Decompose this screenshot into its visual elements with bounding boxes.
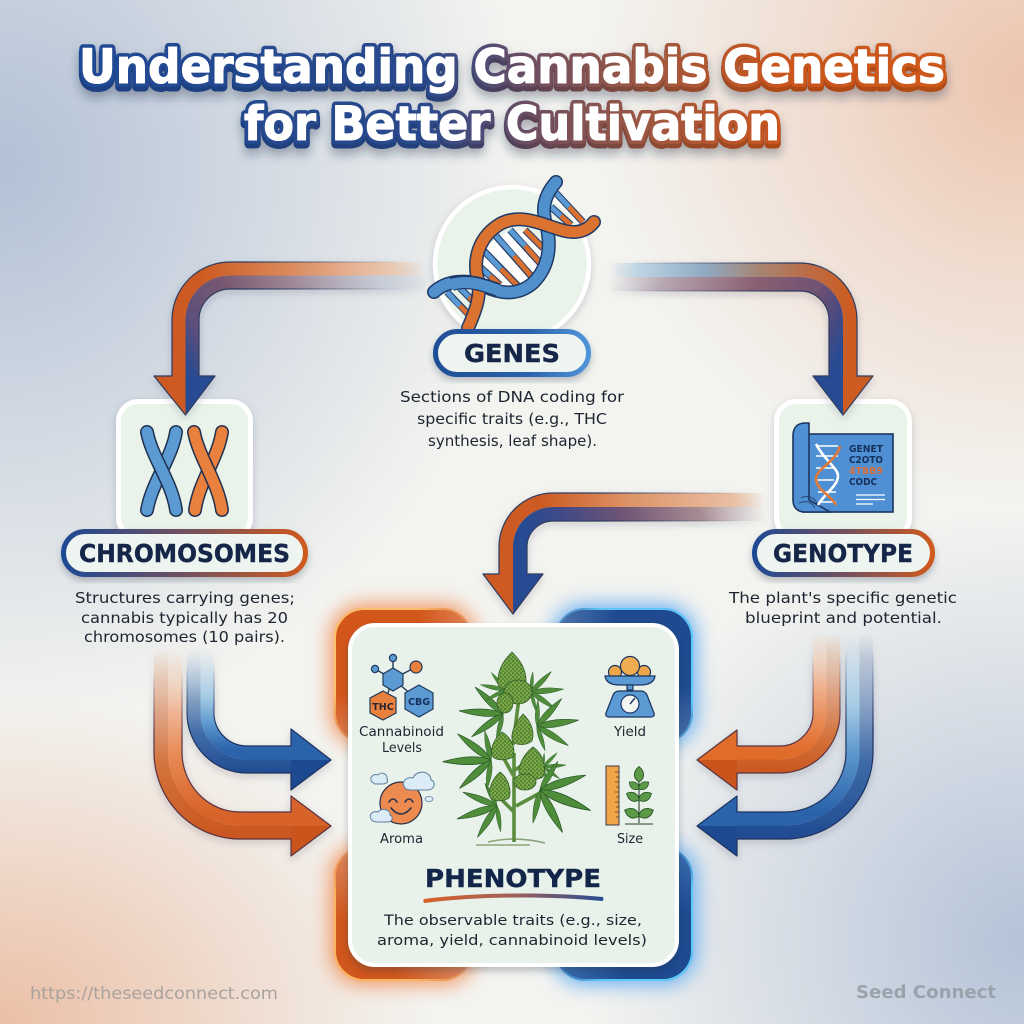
arrow: genotype to phenotype, blue right [697,635,873,856]
text: phenotype description: aroma, yield, cannabinoid levels) [377,933,647,949]
text: genotype description [728,589,957,627]
arrow: genes to chromosomes [154,262,425,415]
text: genotype description: blueprint and potential. [745,609,942,627]
icon: genetic blueprint [793,423,893,512]
text: genes description [400,388,625,450]
node: genes [400,182,625,450]
icon: genetic blueprint: C2OTO [849,455,883,466]
label: cannabinoid levels: Levels [382,740,422,756]
label: aroma: Aroma [380,831,423,847]
arrow: genotype to phenotype [483,493,765,614]
title: Understanding Cannabis Genetics [79,44,945,99]
corner brackets [334,608,693,981]
label: yield: Yield [613,724,646,740]
label: cannabinoid levels [359,724,444,756]
genes circle [435,187,589,341]
icon: yield scale [605,656,655,717]
underline [423,893,603,903]
label: genes: GENES [464,339,560,368]
title: for Better Cultivation [244,97,780,152]
text: chromosomes description: chromosomes (10 pairs). [84,628,285,646]
text: genotype description: The plant's specific genetic [728,589,957,607]
label: genotype [754,532,932,574]
footer url: https://theseedconnect.com [30,984,278,1004]
title [79,40,945,156]
genotype card [776,402,910,538]
arrow: genotype to phenotype, orange right [697,635,840,790]
icon: DNA helix [434,182,594,328]
arrow: chromosomes to phenotype, blue [187,650,331,790]
footer brand: Seed Connect [856,982,996,1003]
icon: genetic blueprint: GENET [849,444,883,455]
text: genes description: synthesis, leaf shape). [428,432,597,450]
panel: phenotype [331,605,696,984]
arrow: chromosomes to phenotype, orange [154,650,331,856]
text: genes description: Sections of DNA coding for [400,388,625,406]
icon: ruler and sprout [606,766,655,825]
icon: cannabis plant [442,652,603,845]
icon: genetic blueprint: CODC [849,477,877,488]
title: for Better Cultivation [244,101,780,156]
text: chromosomes description: Structures carrying genes; [75,589,295,607]
title: for Better Cultivation [244,97,780,152]
label: chromosomes [64,532,306,574]
label: cannabinoid levels: Cannabinoid [359,724,444,740]
text: phenotype description: The observable traits (e.g., size, [383,913,642,929]
icon: cannabinoid molecule [370,654,433,720]
icon: cannabinoid molecule: CBG [408,697,430,708]
text: genes description: specific traits (e.g., THC [417,410,607,428]
label: genotype: GENOTYPE [773,539,913,568]
label: genes [436,332,588,374]
node: chromosomes [64,402,306,646]
label: chromosomes: CHROMOSOMES [79,539,290,568]
title: Understanding Cannabis Genetics [79,40,945,95]
heading: phenotype: PHENOTYPE [425,864,601,893]
text: phenotype description [377,913,647,949]
icon: genetic blueprint: 4TBB9 [849,466,883,477]
icon: chromosome pair [147,432,222,510]
arrow: genes to genotype [610,263,873,415]
label: size: Size [617,831,643,847]
text: chromosomes description [75,589,295,646]
phenotype card [350,625,677,965]
node: genotype [728,402,957,627]
chromosomes card [118,402,250,538]
text: chromosomes description: cannabis typically has 20 [81,609,288,627]
icon: cannabinoid molecule: THC [372,702,394,713]
icon: aroma face [370,772,434,824]
corner glows [331,605,696,984]
title: Understanding Cannabis Genetics [79,40,945,95]
